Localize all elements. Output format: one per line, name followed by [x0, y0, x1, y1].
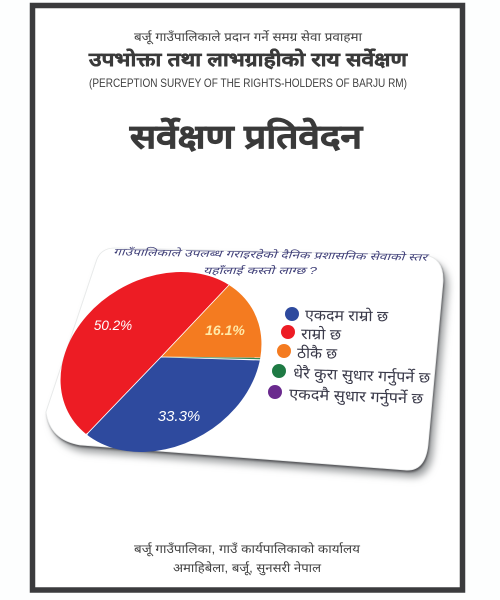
legend item: needs total improvement: एकदमै सुधार गर्नुपर्ने छ: [289, 385, 424, 409]
slice: 33.3%: [87, 356, 260, 452]
card surface: [46, 248, 443, 470]
pie value labels: [94, 318, 245, 425]
card shadow: [51, 255, 448, 477]
legend item: needs much improvement: धेरै कुरा सुधार गर्नुपर्ने छ: [293, 364, 431, 388]
pie value labels: 16.1%: [205, 322, 245, 338]
header: survey title: उपभोक्ता तथा लाभग्राहीको राय सर्वेक्षण: [88, 48, 409, 71]
chart question: [113, 246, 430, 277]
chart question: यहाँलाई कस्तो लाग्छ ?: [203, 265, 318, 277]
pie value labels: 33.3%: [158, 408, 200, 425]
legend item: good: राम्रो छ: [301, 325, 342, 344]
legend item: good: [281, 325, 342, 344]
pie chart: [60, 272, 262, 452]
card edge: [47, 250, 444, 472]
slice: 50.2%: [60, 272, 229, 434]
footer: office name: बर्जू गाउँपालिका, गाउँ कार्यपालिकाको कार्यालय: [134, 542, 361, 557]
header: subtitle line: बर्जू गाउँपालिकाले प्रदान गर्ने समग्र सेवा प्रवाहमा: [134, 30, 363, 45]
legend item: okay: ठीकै छ: [297, 344, 338, 363]
report heading: सर्वेक्षण प्रतिवेदन: [129, 117, 364, 155]
pie value labels: 50.2%: [94, 318, 132, 333]
tilted chart card: [45, 246, 453, 482]
legend item: very good: एकदम राम्रो छ: [305, 306, 389, 325]
header: English subtitle: (PERCEPTION SURVEY OF THE RIGHTS-HOLDERS OF BARJU RM): [89, 76, 407, 90]
slice: 16.1%: [160, 284, 262, 358]
chart question: गाउँपालिकाले उपलब्ध गराइरहेको दैनिक प्रशासनिक सेवाको स्तर: [113, 246, 430, 264]
legend: [268, 306, 431, 409]
footer: address: अमाहिबेला, बर्जू, सुनसरी नेपाल: [173, 561, 322, 576]
slice: small green sliver: [162, 357, 260, 360]
legend item: okay: [277, 344, 338, 363]
